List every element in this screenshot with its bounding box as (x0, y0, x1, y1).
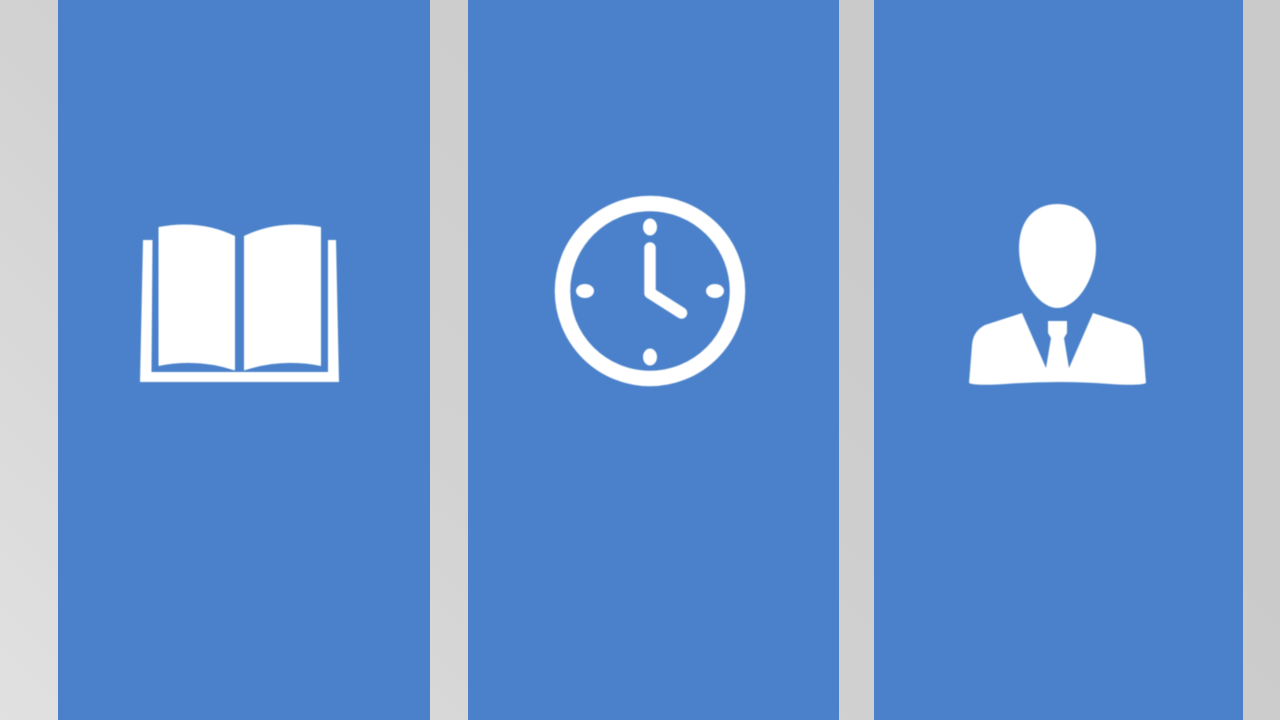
panel: businessman (874, 0, 1243, 720)
icon: clock (562, 204, 738, 378)
icon: businessman (969, 204, 1146, 385)
icon: open book (140, 224, 339, 382)
panel: book (58, 0, 430, 720)
panel: clock (468, 0, 839, 720)
